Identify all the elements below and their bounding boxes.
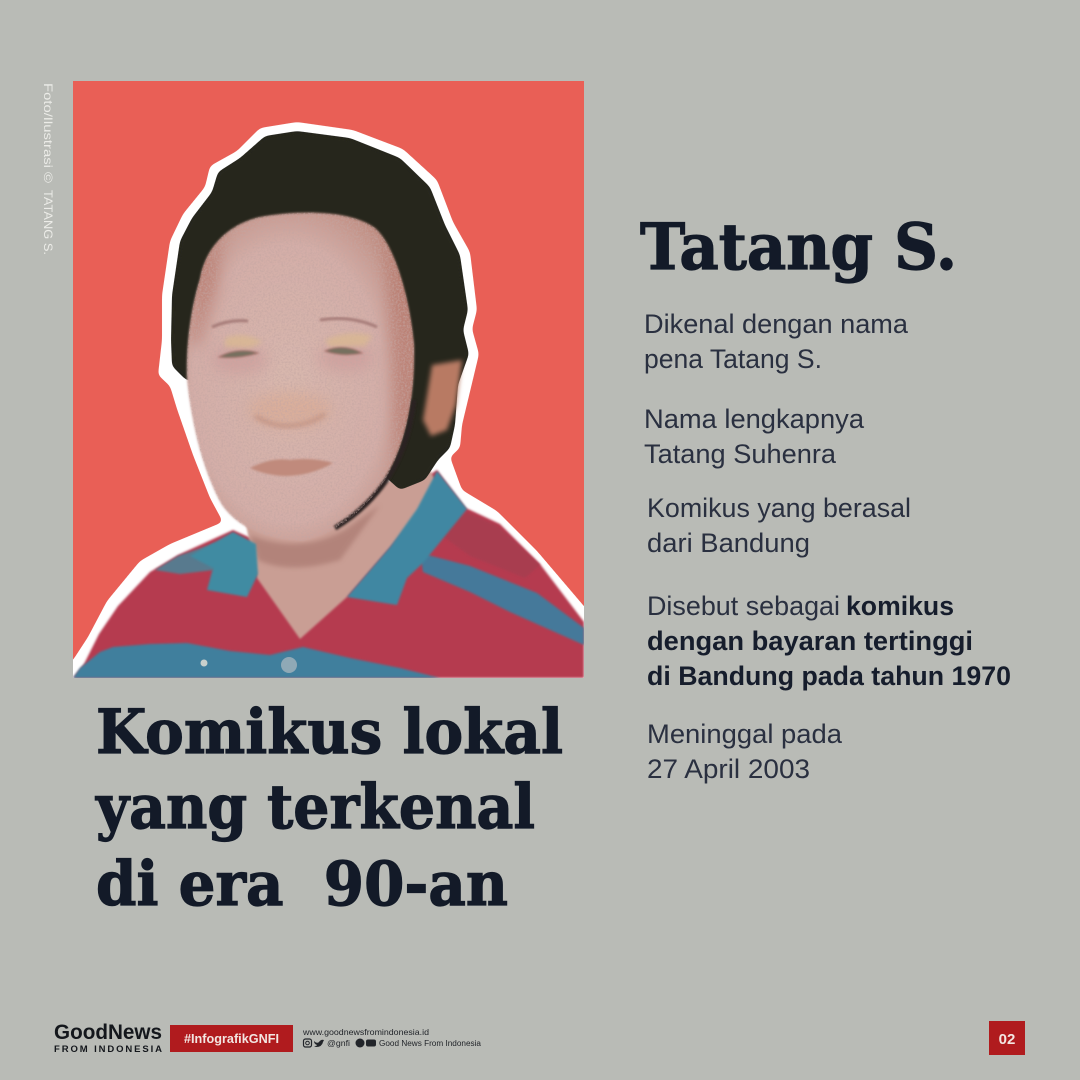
bottom blue stripe xyxy=(73,643,440,678)
jaw hair strand xyxy=(335,400,414,528)
icon: youtube xyxy=(366,1040,376,1046)
text block: death date: Meninggal pada xyxy=(647,719,843,749)
text block: full name: Nama lengkapnya xyxy=(644,404,865,434)
footer contact info: @gnfi xyxy=(327,1039,350,1048)
neck xyxy=(245,470,440,639)
text block: full name xyxy=(644,404,865,469)
face shading and grain xyxy=(186,212,414,532)
panel: portrait photo xyxy=(60,81,600,690)
text block: highest paid: dengan bayaran tertinggi xyxy=(647,626,973,656)
photo credit: Foto/Ilustrasi © xyxy=(41,83,55,183)
page number xyxy=(989,1021,1025,1055)
left collar xyxy=(190,532,258,597)
red photo background xyxy=(73,81,584,678)
icon: instagram xyxy=(304,1039,312,1047)
text block: origin: Komikus yang berasal xyxy=(647,493,911,523)
text block: origin xyxy=(647,493,911,558)
eyes xyxy=(219,347,362,358)
hair xyxy=(171,131,469,490)
text block: pen name: Dikenal dengan nama xyxy=(644,309,909,339)
text block: highest paid: di Bandung pada tahun 1970 xyxy=(647,661,1011,691)
hashtag badge: #InfografikGNFI xyxy=(184,1032,279,1046)
footer contact info: www.goodnewsfromindonesia.id xyxy=(302,1027,429,1037)
left shoulder stripe xyxy=(155,543,215,574)
photo credit xyxy=(41,83,55,255)
main heading: di era 90-an xyxy=(96,849,508,920)
right blue stripe xyxy=(420,553,584,645)
logo: GoodNews: FROM INDONESIA xyxy=(54,1044,162,1055)
photo credit: TATANG S. xyxy=(41,190,55,255)
footer contact info: Good News From Indonesia xyxy=(379,1039,482,1048)
text block: origin: dari Bandung xyxy=(647,528,810,558)
text block: pen name xyxy=(644,309,909,374)
white cut-out outline xyxy=(60,122,600,690)
text block: highest paid: komikus xyxy=(846,591,954,621)
text block: death date: 27 April 2003 xyxy=(647,754,810,784)
text block: highest paid: Disebut sebagai xyxy=(647,591,840,621)
shirt xyxy=(73,470,584,678)
text block: full name: Tatang Suhenra xyxy=(644,439,837,469)
icon: facebook xyxy=(356,1038,364,1048)
neck shadow xyxy=(250,505,380,568)
lips xyxy=(250,459,333,476)
main heading xyxy=(95,697,563,920)
logo: GoodNews xyxy=(54,1021,162,1055)
eyebrows xyxy=(212,319,377,327)
ear xyxy=(423,360,462,436)
name title: Tatang S. xyxy=(640,210,957,285)
logo: GoodNews: GoodNews xyxy=(54,1021,162,1044)
text block: death date xyxy=(647,719,843,784)
text block: pen name: pena Tatang S. xyxy=(644,344,822,374)
face xyxy=(187,213,414,541)
icon: twitter xyxy=(314,1040,324,1047)
nose xyxy=(255,414,325,426)
hashtag badge xyxy=(170,1025,293,1052)
right collar xyxy=(347,471,467,605)
text block: highest paid xyxy=(647,591,1011,691)
page number: 02 xyxy=(999,1031,1015,1048)
eyelids xyxy=(225,333,372,348)
button xyxy=(200,660,208,666)
main heading: yang terkenal xyxy=(95,772,535,843)
main heading: Komikus lokal xyxy=(96,697,563,768)
deep red upper right xyxy=(446,513,541,577)
footer contact info xyxy=(302,1027,482,1048)
